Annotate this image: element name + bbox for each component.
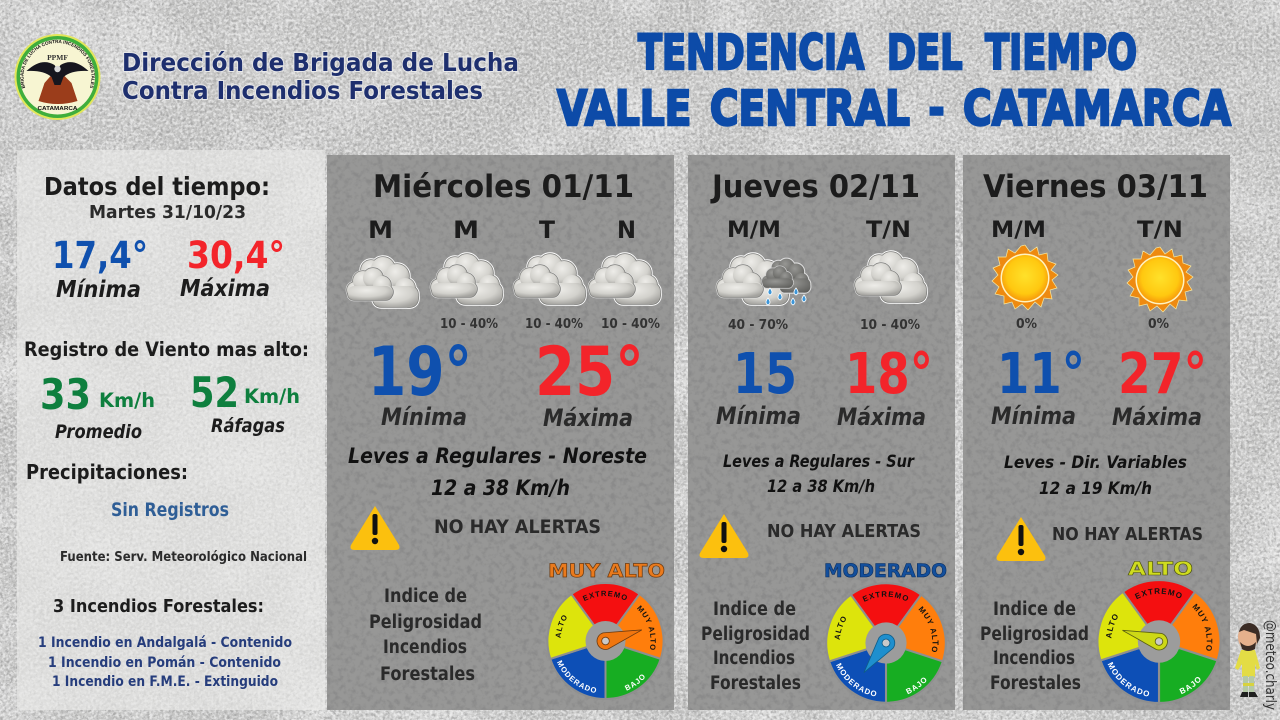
rain probabilities: 10 - 40% — [601, 316, 660, 332]
icon: cloud afternoon — [855, 252, 926, 302]
period labels: M — [453, 216, 479, 244]
icon: cloud night — [589, 254, 660, 304]
label Promedio: Promedio — [55, 421, 142, 443]
icon: warning triangle — [350, 506, 400, 550]
fire list: 1 Incendio en Andalgalá - Contenido — [38, 635, 292, 651]
fire list — [38, 635, 292, 690]
day heading: Miércoles 01/11 — [373, 169, 634, 205]
index label — [701, 599, 810, 694]
fire list: 1 Incendio en F.M.E. - Extinguido — [52, 674, 278, 690]
period labels: T/N — [866, 218, 911, 243]
index label: Forestales — [380, 664, 475, 685]
needle — [1120, 622, 1170, 652]
rain probabilities: 10 - 40% — [860, 317, 920, 333]
logo: brigade badge: CATAMARCA — [38, 106, 78, 112]
index label: Forestales — [710, 673, 801, 694]
heading: Datos del tiempo: Datos del tiempo: — [44, 172, 270, 201]
icon: cloud morning — [347, 257, 418, 307]
logo: brigade badge: PPMF — [47, 53, 68, 62]
label Mínima: Mínima — [56, 277, 141, 303]
period labels: N — [617, 216, 636, 244]
index label: Forestales — [990, 673, 1081, 694]
icon: cloud with rain — [717, 254, 810, 305]
icon: cloud midday — [431, 254, 502, 304]
minimum temperature: 17,4° — [52, 234, 148, 277]
period labels — [727, 218, 911, 243]
index label: Indice de — [713, 599, 796, 620]
panel: Jueves — [688, 155, 955, 710]
header: institution name: Contra Incendios Forestales — [122, 76, 483, 105]
wind speed: 12 a 38 Km/h — [431, 476, 570, 500]
header: institution name — [122, 48, 519, 105]
gauge: muy alto — [547, 583, 664, 699]
rain probabilities: 10 - 40% — [525, 316, 583, 332]
index label: Peligrosidad — [980, 624, 1089, 645]
needle — [595, 622, 644, 652]
index label: Indice de — [993, 599, 1076, 620]
icon: warning triangle — [700, 514, 748, 558]
maximum temperature: 27° — [1118, 342, 1207, 407]
rain probabilities: 0% — [1016, 316, 1037, 332]
index label — [369, 586, 482, 685]
danger level: MUY ALTO — [548, 560, 665, 582]
period labels: M/M — [991, 218, 1046, 243]
period labels: M — [368, 216, 393, 244]
panel: Viernes — [963, 155, 1230, 710]
average wind value: Km/h — [99, 389, 155, 412]
gust wind value: 52 — [190, 368, 239, 417]
rain probabilities — [1016, 316, 1169, 332]
day heading: Jueves 02/11 — [710, 169, 920, 205]
rain probabilities — [440, 316, 660, 332]
period labels — [368, 216, 636, 244]
wind description: Leves - Dir. Variables — [1004, 453, 1187, 473]
index label: Incendios — [383, 637, 467, 658]
maximum temperature: 30,4° — [187, 234, 285, 277]
label Mínima: Mínima — [991, 402, 1076, 430]
panel: current data — [17, 150, 325, 710]
gust wind value — [190, 368, 300, 417]
logo: brigade badge — [14, 34, 100, 120]
rain probabilities: 10 - 40% — [440, 316, 498, 332]
icon: sun afternoon — [1127, 247, 1193, 312]
panel: Miércoles — [327, 155, 674, 710]
title — [557, 25, 1231, 137]
gauge: moderado — [826, 583, 946, 703]
average wind value — [40, 370, 155, 419]
label Mínima: Mínima — [381, 403, 467, 431]
label Ráfagas: Ráfagas — [211, 415, 285, 437]
gauge: alto — [1097, 580, 1221, 703]
header: institution name: Dirección de Brigada de Lucha — [122, 48, 519, 77]
fire list: 1 Incendio en Pomán - Contenido — [48, 655, 281, 671]
icon: warning triangle — [996, 517, 1046, 561]
rain probabilities — [728, 317, 920, 333]
icon: cloud afternoon — [514, 254, 585, 304]
author avatar — [1235, 623, 1260, 697]
icon: sun morning — [992, 245, 1058, 310]
maximum temperature: 18° — [845, 342, 933, 407]
index label: Incendios — [713, 648, 795, 669]
heading: precipitation: Precipitaciones: — [26, 460, 188, 484]
danger level: MODERADO — [824, 560, 947, 582]
index label: Indice de — [384, 586, 467, 607]
period labels: T — [539, 216, 556, 244]
heading: forest fires: 3 Incendios Forestales: — [53, 596, 264, 617]
logo: brigade badge: BRIGADA DE LUCHA CONTRA INCENDIOS FORESTALES — [20, 40, 95, 88]
gust wind value: Km/h — [244, 385, 300, 408]
precipitation value: Sin Registros — [111, 499, 229, 521]
index label — [980, 599, 1089, 694]
wind description: Leves a Regulares - Noreste — [348, 444, 647, 468]
period labels: T/N — [1137, 218, 1183, 243]
danger level: ALTO — [1128, 558, 1193, 580]
period labels: M/M — [727, 218, 781, 243]
minimum temperature: 11° — [997, 342, 1085, 407]
needle — [857, 631, 898, 678]
day heading: Viernes 03/11 — [983, 169, 1208, 205]
period labels — [991, 218, 1183, 243]
source note: Fuente: Serv. Meteorológico Nacional — [60, 550, 307, 565]
wind speed: 12 a 19 Km/h — [1039, 479, 1152, 499]
wind speed: 12 a 38 Km/h — [767, 477, 875, 497]
label Mínima: Mínima — [716, 402, 801, 430]
rain probabilities: 0% — [1148, 316, 1169, 332]
alert text: NO HAY ALERTAS — [1052, 525, 1203, 545]
rain probabilities: 40 - 70% — [728, 317, 788, 333]
maximum temperature: 25° — [535, 333, 644, 412]
index label: Peligrosidad — [369, 612, 482, 633]
heading: wind record: Registro de Viento mas alto: — [24, 338, 309, 361]
alert text: NO HAY ALERTAS — [767, 522, 921, 542]
label Máxima: Máxima — [543, 404, 633, 432]
minimum temperature: 15 — [733, 342, 797, 407]
index label: Incendios — [993, 648, 1075, 669]
label Máxima: Máxima — [1112, 403, 1202, 431]
label Máxima: Máxima — [180, 276, 270, 302]
date: Martes 31/10/23 — [89, 202, 246, 223]
label Máxima: Máxima — [837, 403, 926, 431]
index label: Peligrosidad — [701, 624, 810, 645]
minimum temperature: 19° — [368, 333, 472, 412]
average wind value: 33 — [40, 370, 91, 419]
wind description: Leves a Regulares - Sur — [723, 452, 915, 472]
alert text: NO HAY ALERTAS — [434, 517, 601, 538]
